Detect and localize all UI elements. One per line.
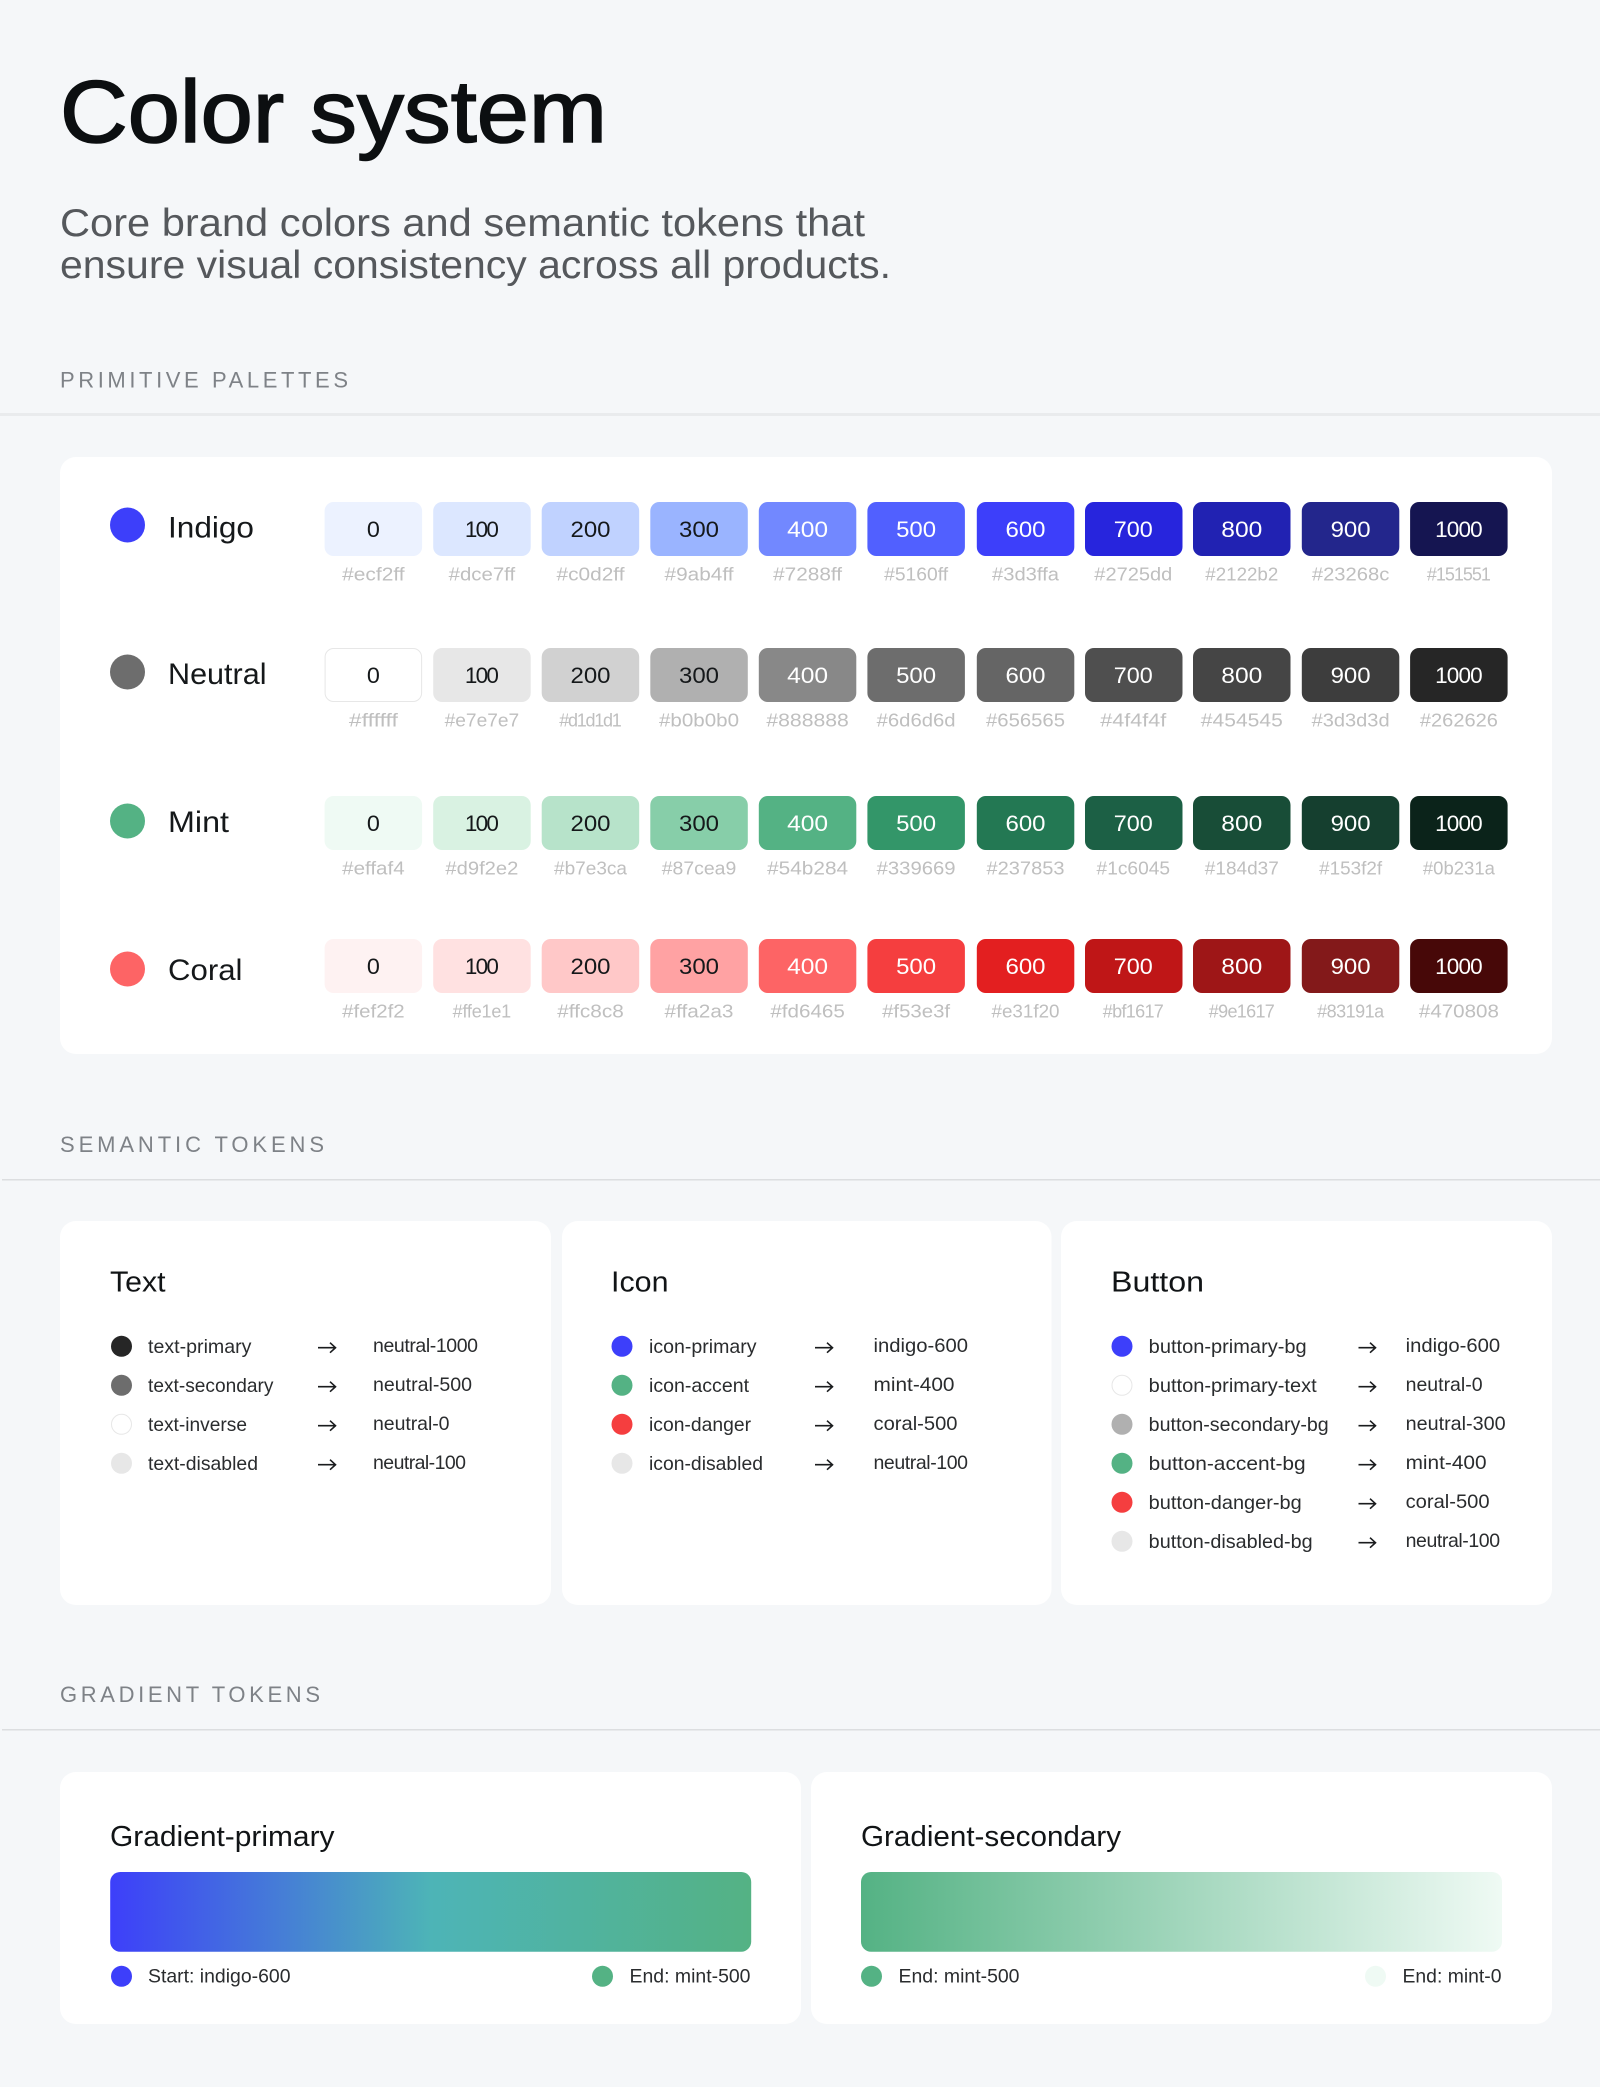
token row: button-disabled-bg: button-disabled-bg: [1149, 1531, 1313, 1553]
indigo swatches: #ecf2ff: [342, 564, 406, 584]
token row: button-secondary-bg: neutral-300: [1406, 1413, 1506, 1435]
token row: text-primary: neutral-1000: [373, 1335, 478, 1357]
coral swatches: #e31f20: [992, 1002, 1060, 1022]
mint swatches: 300: [679, 811, 719, 836]
coral swatches: #470808: [1419, 1002, 1499, 1022]
palette name: coral: Coral: [168, 954, 242, 987]
indigo swatches: #2122b2: [1205, 564, 1278, 584]
coral swatches: 200: [570, 954, 610, 979]
token row: text-disabled: neutral-100: [373, 1452, 466, 1474]
token row: text-primary: [111, 1335, 478, 1358]
coral swatches: #bf1617: [1103, 1002, 1164, 1022]
token row: icon-disabled: neutral-100: [874, 1452, 968, 1474]
indigo swatches: 800: [1221, 517, 1262, 542]
palette name: neutral: Neutral: [168, 658, 266, 691]
neutral swatches: #656565: [986, 710, 1065, 730]
mint swatches: 900: [1331, 811, 1371, 836]
indigo swatches: 1000: [1435, 517, 1483, 542]
neutral swatches: 400: [787, 663, 828, 688]
indigo swatches: #23268c: [1312, 564, 1389, 584]
palette name: mint: Mint: [168, 806, 230, 839]
token row: icon-primary: indigo-600: [874, 1335, 968, 1357]
indigo swatches: #5160ff: [884, 564, 949, 584]
token row: button-danger-bg: [1112, 1491, 1490, 1514]
indigo swatches: 400: [787, 517, 828, 542]
section heading: gradient tokens: GRADIENT TOKENS: [60, 1682, 320, 1707]
mint swatches: 0: [367, 811, 380, 836]
coral swatches: #fd6465: [770, 1002, 845, 1022]
legend: start indigo-600: Start: indigo-600: [148, 1966, 291, 1988]
neutral swatches: #d1d1d1: [559, 710, 622, 730]
token row: text-disabled: text-disabled: [148, 1453, 258, 1475]
token row: button-secondary-bg: button-secondary-bg: [1149, 1414, 1329, 1436]
card heading: button: Button: [1111, 1267, 1204, 1299]
indigo swatches: #7288ff: [773, 564, 843, 584]
icon: neutral dot: [110, 654, 145, 690]
indigo swatches: #3d3ffa: [992, 564, 1060, 584]
panel: gradient secondary: [811, 1772, 1552, 2024]
token row: button-primary-bg: [1112, 1335, 1500, 1358]
token row: button-accent-bg: [1112, 1452, 1487, 1475]
mint swatches: [325, 796, 1508, 878]
token row: icon-danger: [612, 1413, 958, 1436]
token row: icon-disabled: [612, 1452, 968, 1475]
indigo palette row: [110, 502, 1508, 584]
neutral swatches: #4f4f4f: [1100, 710, 1167, 730]
neutral swatches: 200: [570, 663, 610, 688]
mint swatches: 800: [1221, 811, 1262, 836]
token row: button-secondary-bg: [1112, 1413, 1506, 1436]
coral swatches: 1000: [1435, 954, 1483, 979]
mint swatches: #d9f2e2: [445, 858, 518, 878]
panel: gradient primary: [60, 1772, 801, 2024]
panel: button tokens: [1061, 1221, 1552, 1605]
neutral swatches: 500: [896, 663, 936, 688]
indigo swatches: 100: [465, 517, 499, 542]
panel: text tokens: [60, 1221, 551, 1605]
card heading: text: Text: [110, 1267, 166, 1299]
token row: button-primary-text: button-primary-text: [1149, 1375, 1317, 1397]
neutral swatches: 900: [1331, 663, 1371, 688]
mint swatches: 1000: [1435, 811, 1483, 836]
coral swatches: 800: [1221, 954, 1262, 979]
coral swatches: #9e1617: [1209, 1002, 1275, 1022]
card heading: icon: Icon: [611, 1267, 668, 1299]
token row: text-inverse: [112, 1413, 450, 1436]
mint swatches: #0b231a: [1423, 858, 1496, 878]
coral swatches: #ffc8c8: [557, 1002, 624, 1022]
mint swatches: 400: [787, 811, 828, 836]
token row: button-primary-text: [1112, 1374, 1483, 1397]
coral swatches: 600: [1006, 954, 1046, 979]
token row: icon-primary: [612, 1335, 968, 1358]
token row: button-accent-bg: mint-400: [1406, 1452, 1487, 1474]
token row: button-primary-bg: indigo-600: [1406, 1335, 1500, 1357]
mint palette row: [110, 796, 1508, 878]
coral swatches: 0: [367, 954, 380, 979]
token row: text-disabled: [111, 1452, 466, 1475]
neutral swatches: #6d6d6d: [877, 710, 956, 730]
mint swatches: #184d37: [1205, 858, 1279, 878]
gradient bar: secondary: [861, 1872, 1502, 1952]
coral swatches: #ffa2a3: [664, 1002, 734, 1022]
neutral swatches: 800: [1221, 663, 1262, 688]
coral swatches: [325, 939, 1508, 1022]
mint swatches: 100: [465, 811, 499, 836]
indigo swatches: 300: [679, 517, 719, 542]
neutral swatches: 600: [1006, 663, 1046, 688]
mint swatches: #153f2f: [1319, 858, 1383, 878]
neutral swatches: #888888: [766, 710, 849, 730]
subtitle: Core brand colors and semantic tokens that: [60, 202, 865, 245]
indigo swatches: [325, 502, 1508, 584]
mint swatches: #1c6045: [1097, 858, 1170, 878]
legend: end mint-0: End: mint-0: [1402, 1966, 1502, 1988]
token row: icon-accent: icon-accent: [649, 1375, 750, 1397]
mint swatches: 700: [1114, 811, 1153, 836]
token row: text-secondary: neutral-500: [373, 1374, 472, 1396]
mint swatches: #54b284: [767, 858, 848, 878]
icon: coral dot: [110, 952, 145, 986]
legend: end mint-500: End: mint-500: [898, 1966, 1020, 1988]
section heading: primitive palettes: PRIMITIVE PALETTES: [60, 368, 348, 392]
token row: button-primary-text: neutral-0: [1406, 1374, 1483, 1396]
coral swatches: #ffe1e1: [453, 1002, 511, 1022]
indigo swatches: 0: [367, 517, 380, 542]
palette name: indigo: Indigo: [168, 512, 254, 544]
neutral swatches: #454545: [1201, 710, 1283, 730]
token row: button-accent-bg: button-accent-bg: [1149, 1453, 1306, 1475]
token row: icon-danger: coral-500: [874, 1413, 958, 1435]
subtitle: [60, 202, 891, 287]
mint swatches: 600: [1006, 811, 1046, 836]
mint swatches: #87cea9: [662, 858, 736, 878]
mint swatches: #b7e3ca: [554, 858, 628, 878]
coral swatches: #f53e3f: [882, 1002, 951, 1022]
indigo swatches: #2725dd: [1094, 564, 1172, 584]
neutral swatches: 700: [1114, 663, 1153, 688]
coral swatches: 300: [679, 954, 719, 979]
coral swatches: 400: [787, 954, 828, 979]
indigo swatches: #151551: [1427, 564, 1491, 584]
token row: icon-accent: [612, 1374, 955, 1397]
token row: icon-primary: icon-primary: [649, 1336, 757, 1358]
token row: text-secondary: text-secondary: [148, 1375, 274, 1397]
gradient bar: primary: [110, 1872, 751, 1952]
legend: end mint-500: End: mint-500: [630, 1966, 751, 1988]
token row: button-primary-bg: button-primary-bg: [1149, 1336, 1307, 1358]
subtitle: ensure visual consistency across all products.: [60, 244, 891, 287]
neutral swatches: 0: [367, 663, 380, 688]
token row: text-secondary: [111, 1374, 472, 1397]
indigo swatches: 600: [1006, 517, 1046, 542]
card heading: gradient-secondary: Gradient-secondary: [861, 1821, 1122, 1853]
neutral swatches: #ffffff: [349, 710, 399, 730]
neutral palette row: [110, 648, 1508, 730]
neutral swatches: #3d3d3d: [1312, 710, 1390, 730]
indigo swatches: #c0d2ff: [556, 564, 626, 584]
coral palette row: [110, 939, 1508, 1022]
neutral swatches: 300: [679, 663, 719, 688]
section heading: semantic tokens: SEMANTIC TOKENS: [60, 1132, 324, 1157]
token row: button-danger-bg: button-danger-bg: [1149, 1492, 1302, 1514]
panel: icon tokens: [562, 1221, 1052, 1605]
title: Color system: [60, 62, 607, 161]
mint swatches: 200: [570, 811, 610, 836]
token row: icon-disabled: icon-disabled: [649, 1453, 763, 1475]
token row: icon-danger: icon-danger: [649, 1414, 752, 1436]
icon: mint dot: [110, 804, 145, 838]
indigo swatches: 700: [1114, 517, 1153, 542]
coral swatches: #fef2f2: [342, 1002, 405, 1022]
token row: text-inverse: text-inverse: [148, 1414, 247, 1436]
indigo swatches: #dce7ff: [449, 564, 516, 584]
token row: text-primary: text-primary: [148, 1336, 252, 1358]
mint swatches: #339669: [877, 858, 956, 878]
token row: button-danger-bg: coral-500: [1406, 1491, 1490, 1513]
coral swatches: 900: [1331, 954, 1371, 979]
mint swatches: 500: [896, 811, 936, 836]
neutral swatches: 100: [465, 663, 499, 688]
coral swatches: #83191a: [1317, 1002, 1385, 1022]
coral swatches: 700: [1114, 954, 1153, 979]
neutral swatches: 1000: [1435, 663, 1483, 688]
neutral swatches: #e7e7e7: [445, 710, 519, 730]
coral swatches: 100: [465, 954, 499, 979]
neutral swatches: #b0b0b0: [659, 710, 739, 730]
indigo swatches: 500: [896, 517, 936, 542]
icon: indigo dot: [110, 508, 145, 542]
token row: icon-accent: mint-400: [874, 1374, 955, 1396]
token row: button-disabled-bg: neutral-100: [1406, 1530, 1500, 1552]
neutral swatches: #262626: [1420, 710, 1498, 730]
mint swatches: #effaf4: [342, 858, 405, 878]
indigo swatches: #9ab4ff: [664, 564, 735, 584]
card heading: gradient-primary: Gradient-primary: [110, 1821, 335, 1853]
panel: primitive palettes: [60, 457, 1552, 1054]
indigo swatches: 900: [1331, 517, 1371, 542]
neutral swatches: [325, 648, 1508, 730]
coral swatches: 500: [896, 954, 936, 979]
mint swatches: #237853: [986, 858, 1064, 878]
token row: text-inverse: neutral-0: [373, 1413, 450, 1435]
indigo swatches: 200: [570, 517, 610, 542]
token row: button-disabled-bg: [1112, 1530, 1500, 1553]
